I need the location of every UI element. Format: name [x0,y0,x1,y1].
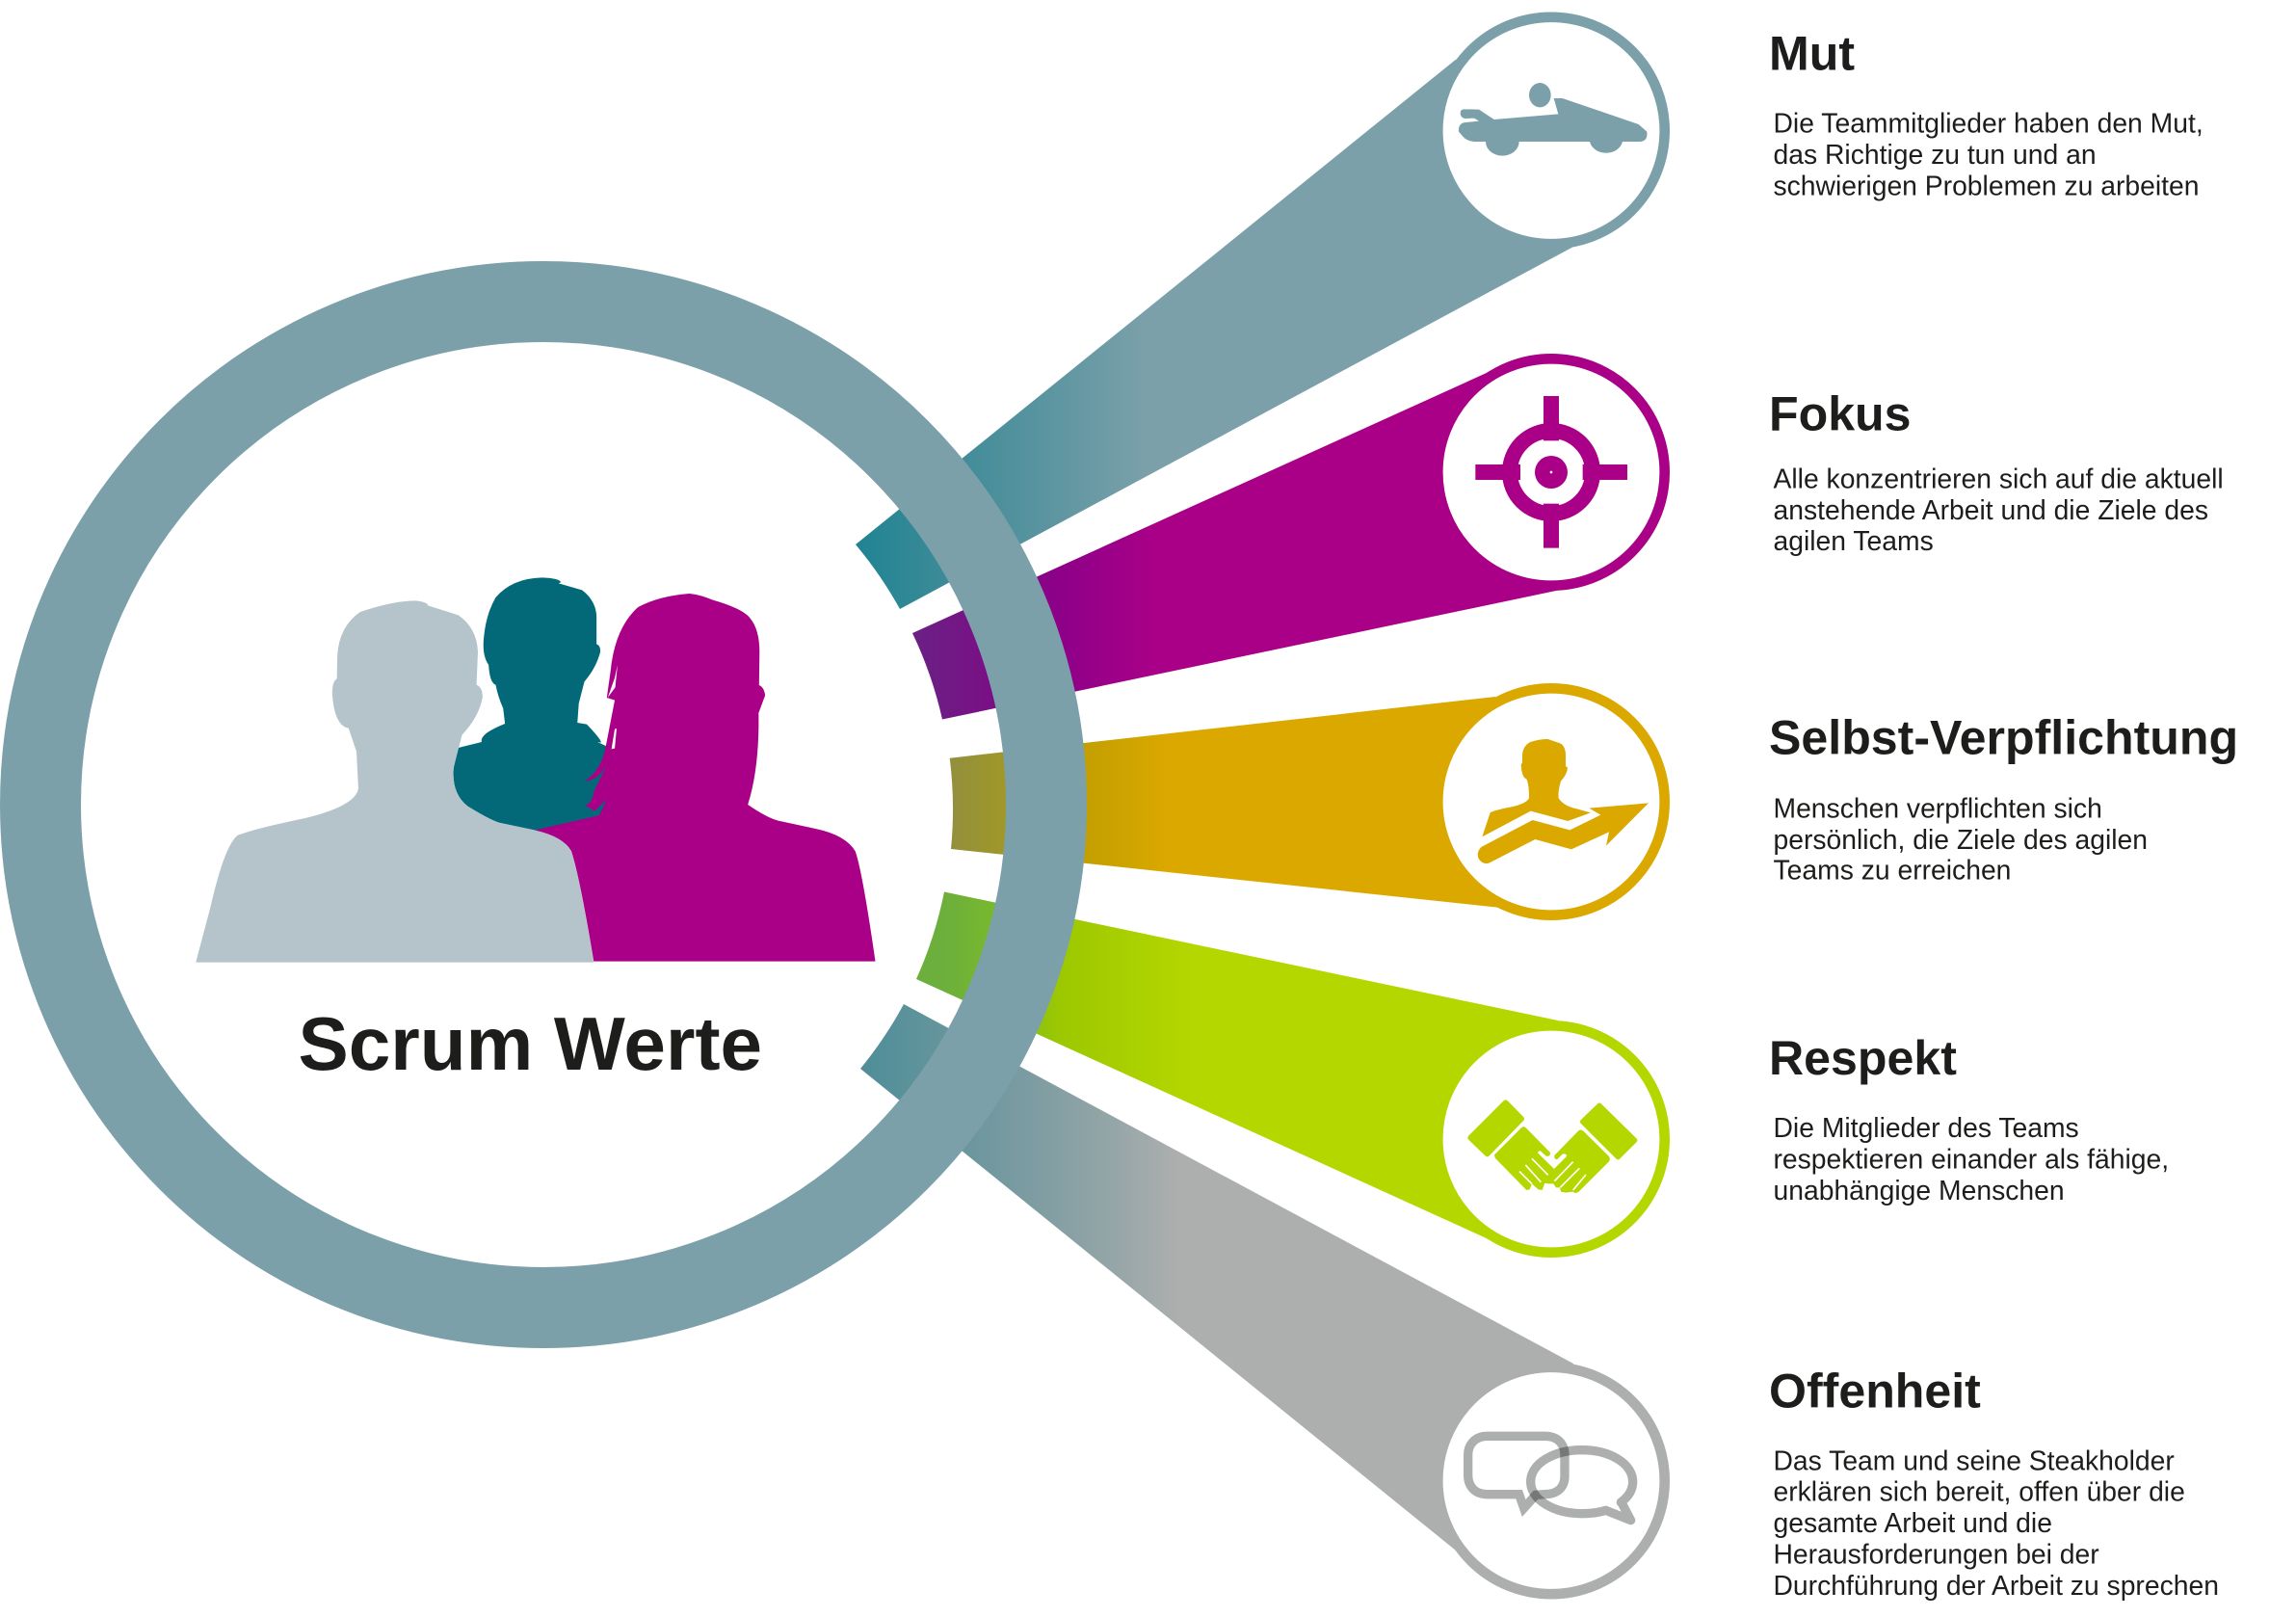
text block: Mut [1769,27,2204,201]
text block: Offenheit: Offenheit [1769,1365,1981,1418]
text block: Offenheit: Das Team und seine Steakholder [1773,1445,2175,1476]
icon circle: Respekt handshake [1438,1025,1665,1253]
text block: Fokus: agilen Teams [1773,525,1934,556]
text block: Offenheit [1769,1365,2219,1601]
beam: Respekt [916,892,1558,1239]
text block: Mut: das Richtige zu tun und an [1773,139,2097,170]
silhouette: gray person [196,600,594,963]
text block: Respekt [1769,1031,2169,1206]
text block: Selbst-Verpflichtung: persönlich, die Ziele des agilen [1773,824,2148,855]
text block: Respekt: Respekt [1769,1031,1957,1085]
text block: Selbst-Verpflichtung: Teams zu erreichen [1773,855,2011,886]
text block: Mut: Mut [1769,27,1855,81]
text block: Selbst-Verpflichtung: Selbst-Verpflichtung [1769,711,2238,765]
text block: Offenheit: Herausforderungen bei der [1773,1539,2099,1570]
text block: Selbst-Verpflichtung [1769,711,2238,886]
silhouette: teal person [454,577,615,831]
title: Scrum Werte [299,1001,762,1086]
text block: Respekt: respektieren einander als fähige, [1773,1144,2169,1175]
text block: Offenheit: erklären sich bereit, offen über die [1773,1476,2185,1507]
text block: Mut: schwierigen Problemen zu arbeiten [1773,171,2199,201]
text block: Fokus [1769,387,2224,556]
icon circle: Fokus target [1438,358,1665,586]
text block: Respekt: Die Mitglieder des Teams [1773,1112,2079,1143]
text block: Mut: Die Teammitglieder haben den Mut, [1773,107,2204,138]
beam: Offenheit [860,1004,1573,1551]
beam: Fokus [912,372,1556,719]
silhouette: magenta person [534,594,876,962]
text block: Offenheit: gesamte Arbeit und die [1773,1507,2052,1538]
text block: Offenheit: Durchführung der Arbeit zu sprechen [1773,1570,2219,1601]
icon circle: Mut car [1438,17,1665,244]
beam: Mut [856,60,1572,609]
icon circle: Selbst-Verpflichtung person with arrow [1438,688,1665,915]
text block: Fokus: Alle konzentrieren sich auf die aktuell [1773,463,2224,493]
hair gaps [608,665,618,749]
text block: Selbst-Verpflichtung: Menschen verpflichten sich [1773,792,2102,823]
text block: Fokus: anstehende Arbeit und die Ziele des [1773,494,2208,525]
text block: Fokus: Fokus [1769,387,1912,441]
people silhouettes [196,577,876,963]
text block: Respekt: unabhängige Menschen [1773,1175,2065,1206]
beam: Selbst-Verpflichtung [950,697,1551,908]
magnifier ring [40,302,1046,1308]
icon circle: Offenheit speech bubbles [1438,1367,1665,1594]
